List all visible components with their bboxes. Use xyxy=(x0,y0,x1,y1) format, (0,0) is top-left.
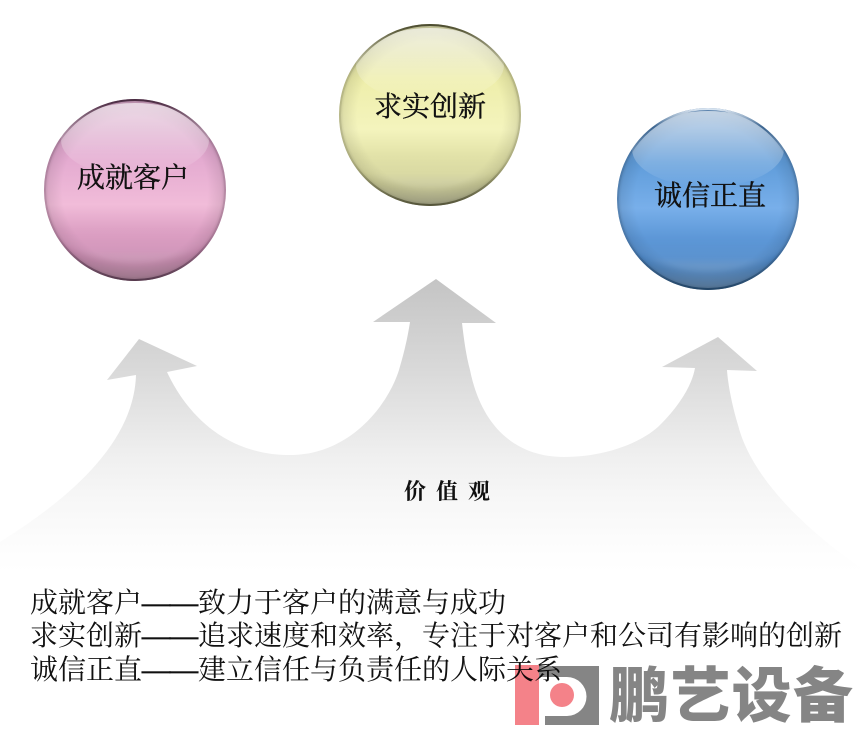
logo mark xyxy=(515,665,599,725)
bottom glow xyxy=(639,249,778,272)
three-headed rising arrow xyxy=(0,279,861,590)
top gloss xyxy=(356,28,504,102)
bottom glow xyxy=(76,245,194,262)
description text: 成就客户——致力于客户的满意与成功 xyxy=(30,587,506,619)
label: 成就客户: 成就客户 xyxy=(77,162,189,194)
description text: 诚信正直——建立信任与负责任的人际关系 xyxy=(30,654,562,686)
sphere: 求实创新 xyxy=(339,24,521,215)
label: 诚信正直: 诚信正直 xyxy=(654,180,766,212)
description text: 求实创新——追求速度和效率，专注于对客户和公司有影响的创新 xyxy=(30,620,842,652)
bottom glow xyxy=(375,172,485,186)
description text xyxy=(30,587,842,686)
logo wordmark: 鹏艺设备 xyxy=(609,663,853,730)
sphere outline xyxy=(340,25,520,205)
label: 求实创新: 求实创新 xyxy=(374,91,486,123)
sphere outline xyxy=(618,109,798,289)
watermark logo xyxy=(515,663,853,730)
arrow caption: 价值观: 价值观 xyxy=(404,479,500,504)
sphere: 成就客户 xyxy=(44,99,226,290)
top gloss xyxy=(632,111,784,187)
top gloss xyxy=(61,103,209,177)
sphere outline xyxy=(45,100,225,280)
sphere: 诚信正直 xyxy=(617,108,799,299)
